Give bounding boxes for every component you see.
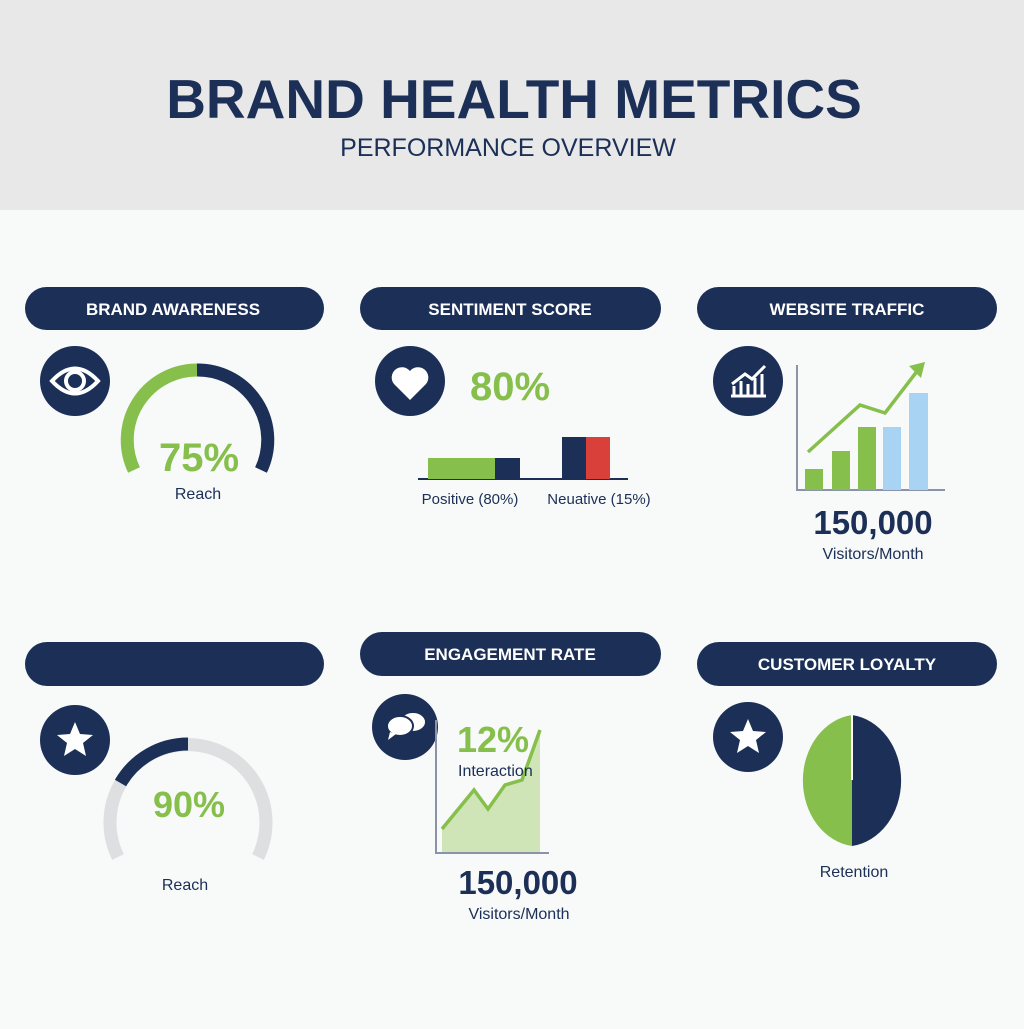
heading pill: ENGAGEMENT RATE [424,645,596,664]
icon: chart [713,346,783,416]
gauge 90%: 90% [153,784,225,825]
panel: customer loyalty [697,642,997,881]
stat [813,504,933,563]
heading pill: SENTIMENT SCORE [428,300,592,319]
header band [0,0,1024,210]
area chart: 12% [457,719,529,760]
heading pill: CUSTOMER LOYALTY [758,655,937,674]
stat: Visitors/Month [822,546,924,563]
pie chart [803,715,901,881]
heading pill [360,632,661,676]
gauge 75% [127,370,268,503]
area chart: Interaction [458,763,533,780]
panel: unnamed reach [25,642,324,894]
title: BRAND HEALTH METRICS [166,68,862,130]
value: 80% [470,365,550,409]
panel: website traffic [697,287,997,563]
stat [458,864,578,923]
gauge 75%: Reach [175,486,221,503]
bar chart [797,362,945,490]
panel: engagement rate [360,632,661,923]
panel: sentiment score [360,287,661,508]
heading pill [25,287,324,330]
area chart [436,719,549,853]
heading pill: WEBSITE TRAFFIC [770,300,924,319]
stat: Visitors/Month [468,906,570,923]
bar chart [418,437,651,508]
gauge 75%: 75% [159,436,239,480]
gauge 90%: Reach [162,877,208,894]
gauge 90% [110,744,266,894]
pie chart: Retention [820,864,888,881]
heading pill [25,642,324,686]
bar chart: Neuative (15%) [547,491,651,508]
heading pill [697,287,997,330]
panel: brand awareness [25,287,324,503]
stat: 150,000 [458,864,578,901]
bar chart: Positive (80%) [422,491,518,508]
icon: star [713,702,783,772]
stat: 150,000 [813,504,933,541]
heading pill [360,287,661,330]
heading pill: BRAND AWARENESS [86,300,260,319]
icon: star [40,705,110,775]
heading pill [697,642,997,686]
icon: chat bubbles [372,694,438,760]
subtitle: PERFORMANCE OVERVIEW [340,134,676,162]
icon: heart [375,346,445,416]
icon: eye [40,346,110,416]
